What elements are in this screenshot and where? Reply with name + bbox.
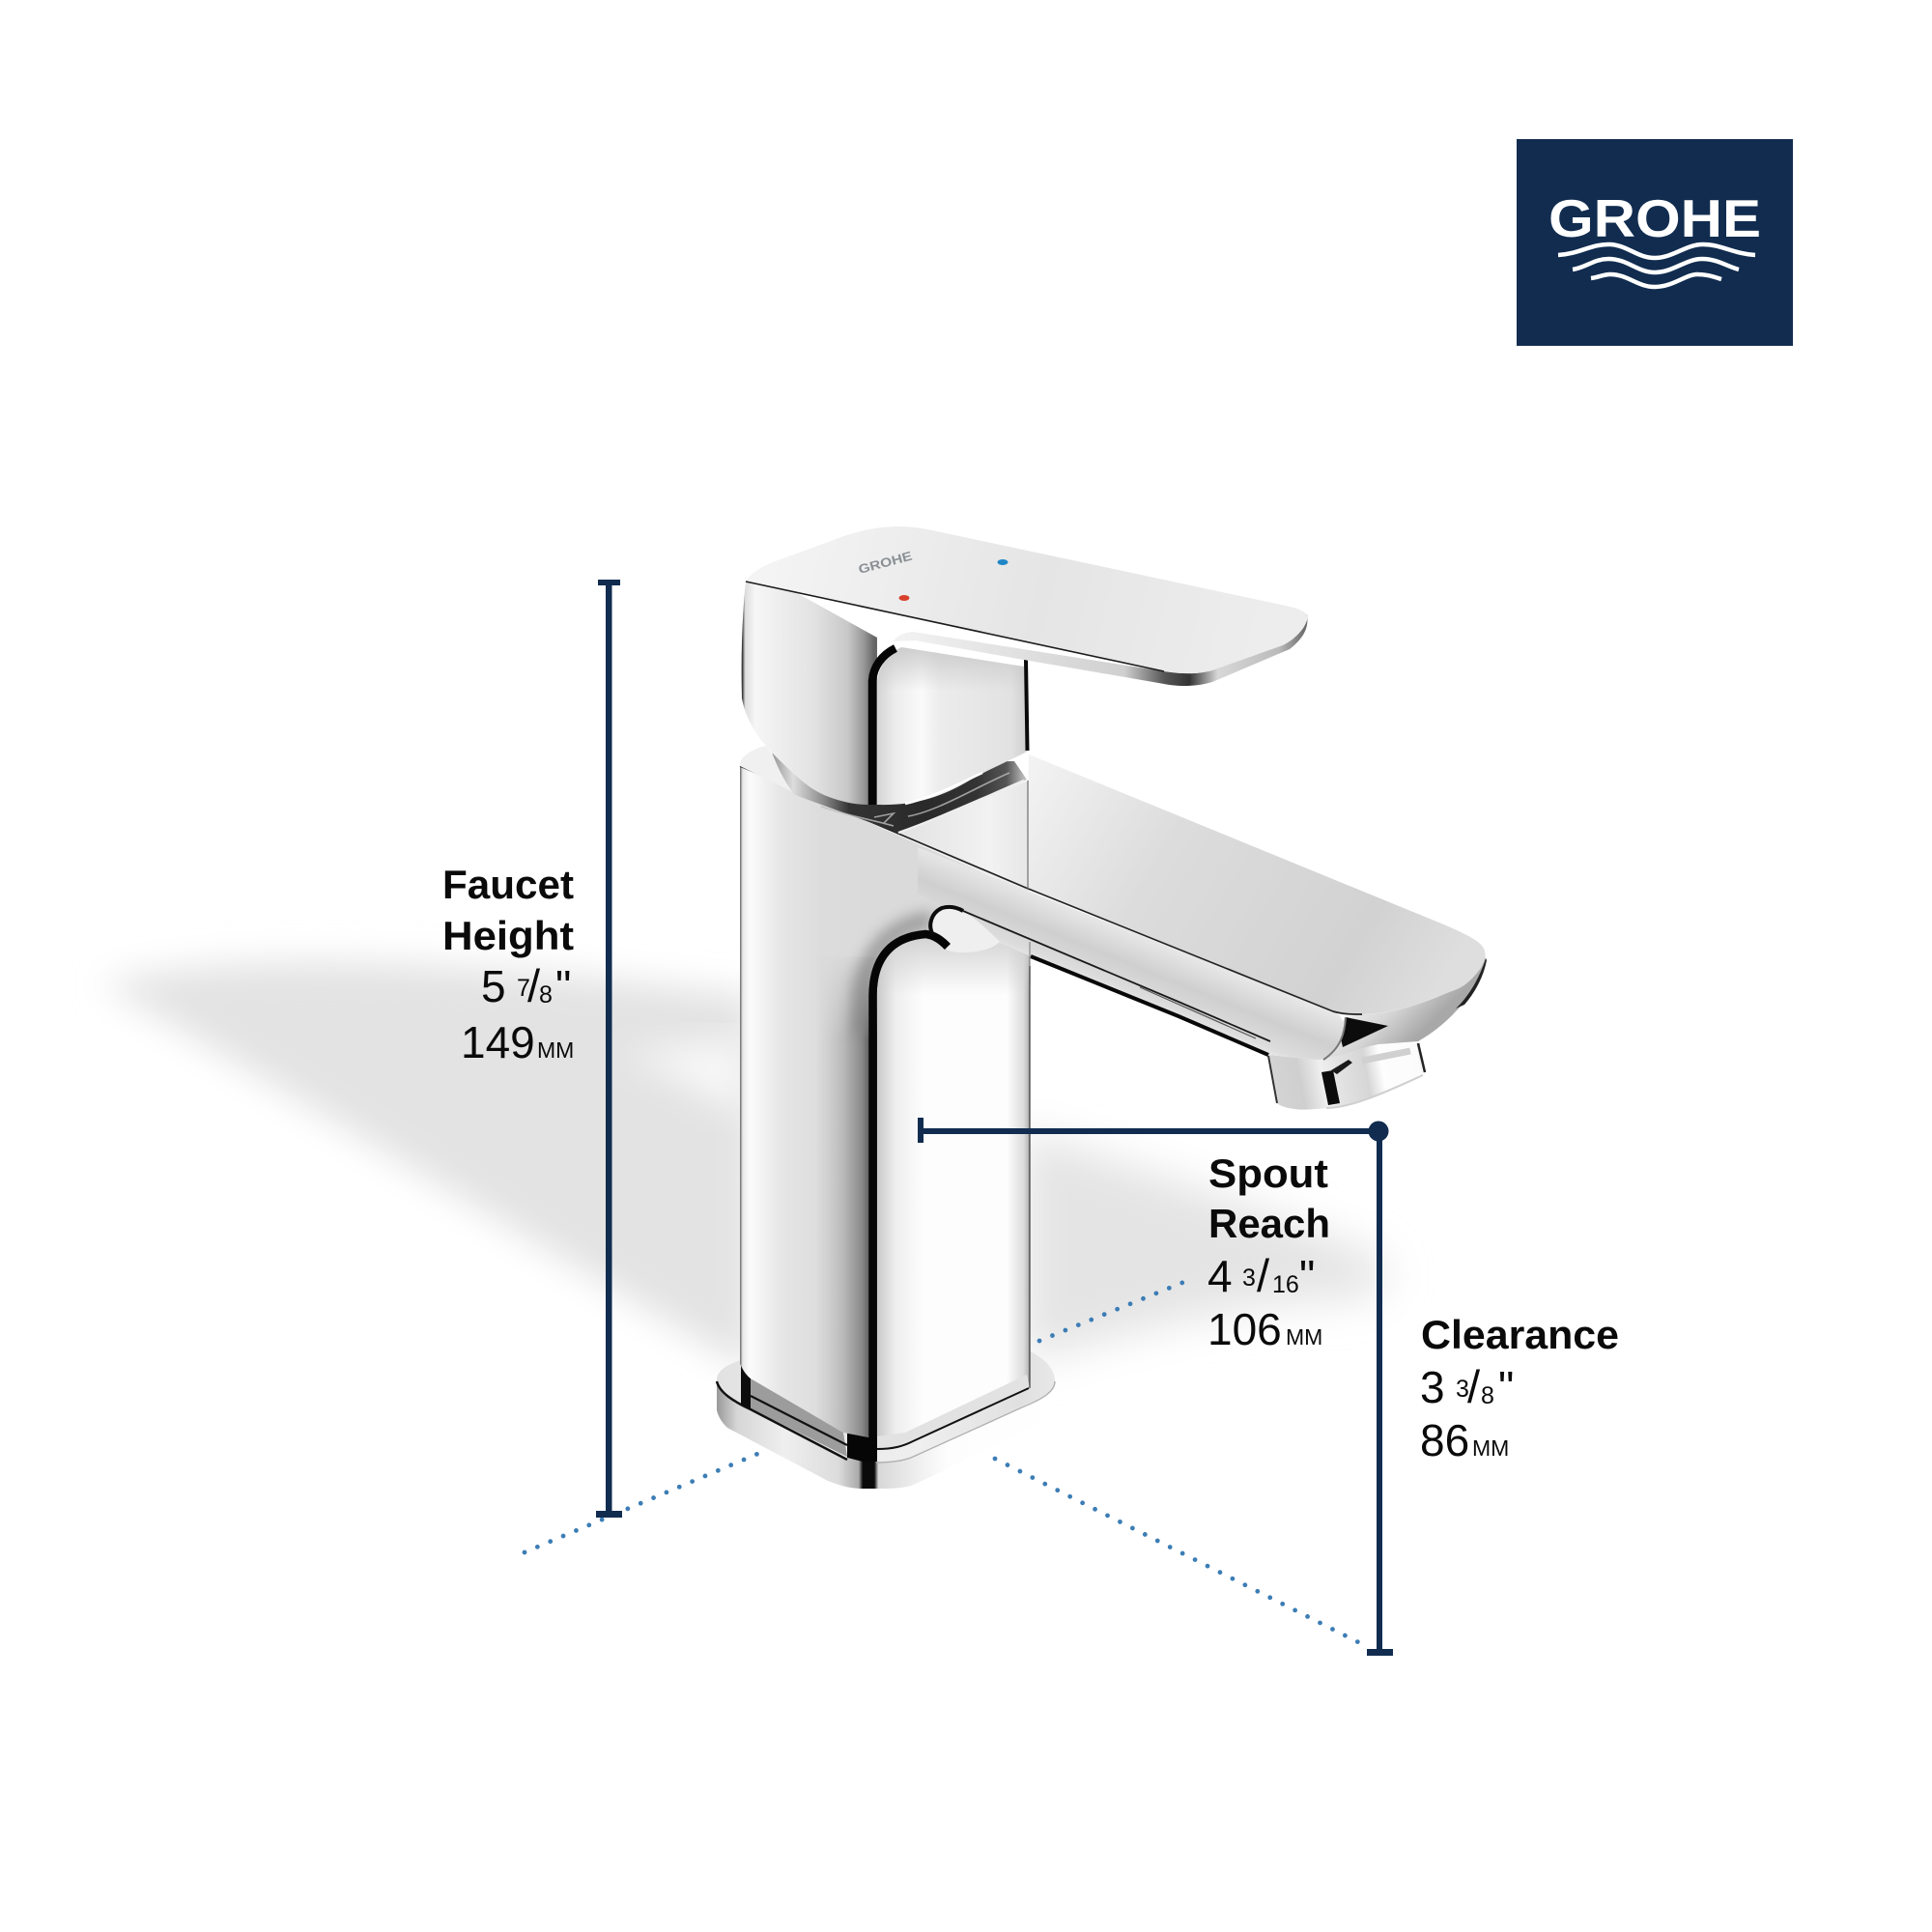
label: clearance: 3 [1420,1362,1445,1412]
label: spout reach [1208,1151,1330,1354]
faucet: spout end round [1323,1017,1346,1060]
faucet: spout lip [1317,956,1486,1060]
faucet: white under spout clearing [1031,960,1266,1092]
dimension line: faucet height [596,580,622,1518]
faucet: spout plate edge line [740,766,1362,1014]
faucet illustration [717,526,1487,1489]
floor shadow [101,962,1387,1372]
label: spout reach: 4 [1208,1251,1233,1301]
faucet: inner panel [877,937,1030,1449]
label: spout reach: 3 [1242,1264,1256,1292]
faucet: panel bottom line [877,1388,1029,1449]
label: faucet height: MM [537,1037,574,1063]
faucet: column dark shading [823,959,877,1437]
label: faucet height: Faucet [442,862,574,907]
label: clearance: MM [1472,1435,1509,1461]
dimension line: clearance [1367,1131,1393,1656]
faucet: panel top shading [877,937,1030,1005]
label: clearance [1420,1312,1619,1465]
faucet: lever underside trim [894,614,1307,686]
faucet: base plate [717,1350,1055,1489]
faucet: center dark line [873,934,948,1439]
label: faucet height: " [555,961,571,1011]
label: faucet height: 7 [517,975,530,1002]
faucet: logo engraving: GROHE [857,549,914,577]
faucet: spout band [918,847,1343,1060]
label: spout reach: Reach [1208,1201,1330,1246]
faucet: cold indicator [997,559,1009,565]
faucet: column right edge [1029,966,1031,1388]
label: spout reach: Spout [1208,1151,1328,1196]
faucet: handle body [742,580,877,805]
faucet: panel bottom facet [877,1375,1030,1449]
faucet: column rear face [892,781,1029,895]
label: spout reach: 106 [1208,1304,1282,1354]
logo: GROHE [1517,139,1793,346]
faucet: dark ring [771,750,1027,833]
faucet: panel highlight under ring [905,773,982,804]
faucet: handle arch [872,648,895,805]
faucet: spout end dark facet [1341,1017,1388,1047]
label: clearance: 86 [1420,1415,1469,1465]
faucet: aerator [1268,1043,1425,1110]
dimension line: spout reach [918,1118,1389,1143]
label: spout reach: / [1257,1250,1270,1301]
faucet: column left face [740,765,1030,1437]
faucet: spout band lower lines [963,911,1270,1055]
faucet: lever top plate [746,526,1307,673]
faucet: hot indicator [898,595,910,601]
label: faucet height: / [527,960,541,1011]
logo: GROHE: GROHE [1548,188,1761,248]
label: clearance: 8 [1481,1382,1494,1409]
faucet: handle right edge [1026,660,1028,751]
label: spout reach: 16 [1272,1271,1299,1298]
label: faucet height: 149 [461,1017,535,1067]
label: clearance: 3 [1456,1376,1469,1403]
label: spout reach: MM [1286,1324,1322,1350]
faucet: arch shadow [862,920,932,1034]
faucet: knob [929,907,1000,952]
faucet: lever front edge line [746,582,1164,671]
faucet: handle panel top shading [877,647,1026,696]
label: faucet height: Height [442,913,574,958]
label: faucet height [442,862,574,1067]
label: faucet height: 5 [481,961,506,1011]
label: clearance: Clearance [1421,1312,1619,1357]
faucet: column top surface [740,746,797,794]
faucet: rear vertical line [1027,781,1029,889]
dotted floor lines [525,1282,1370,1648]
faucet: spout top plate [1026,754,1486,1014]
faucet: knob outline [930,907,963,935]
label: spout reach: " [1299,1251,1315,1301]
faucet: lip dark rim [1456,958,1487,1009]
label: clearance: / [1467,1361,1481,1412]
label: clearance: " [1498,1362,1514,1412]
label: faucet height: 8 [539,981,553,1009]
faucet: handle right panel [877,647,1027,805]
